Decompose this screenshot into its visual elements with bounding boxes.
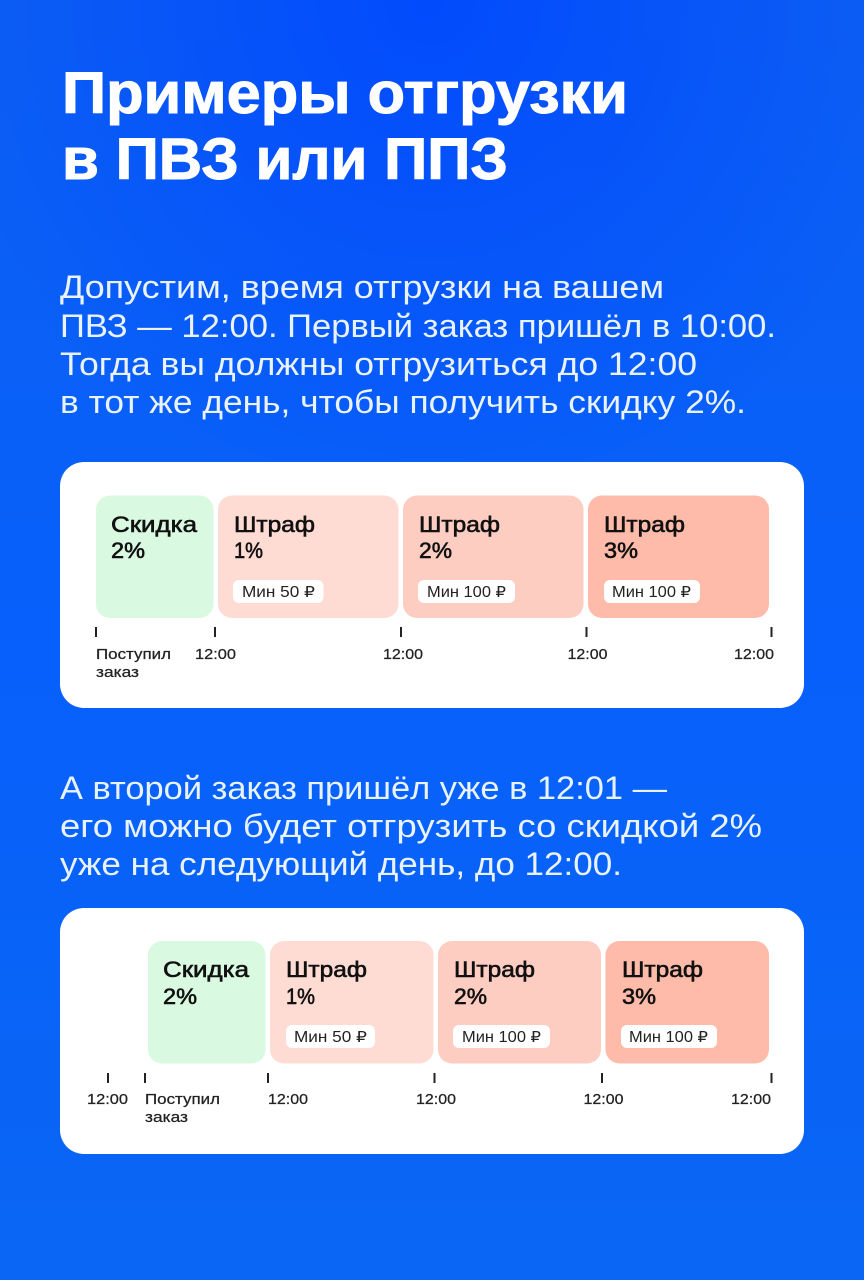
timeline ticks and labels: 12:00 bbox=[734, 646, 774, 663]
title bbox=[62, 61, 628, 192]
text block: first example: Допустим, время отгрузки на вашем bbox=[60, 269, 664, 305]
text block: second example bbox=[60, 770, 762, 882]
timeline ticks and labels: Поступил bbox=[96, 646, 171, 663]
timeline ticks and labels: 12:00 bbox=[568, 646, 608, 663]
segment: penalty 3% bbox=[588, 496, 769, 618]
segment: penalty 1% bbox=[218, 496, 398, 618]
segment: penalty 1%: 1% bbox=[234, 538, 263, 563]
timeline ticks and labels: 12:00 bbox=[584, 1091, 624, 1108]
segment: discount 2% bbox=[148, 941, 266, 1064]
segment: penalty 1% bbox=[270, 941, 434, 1064]
segment: penalty 3%: 3% bbox=[604, 538, 638, 563]
segment: penalty 1%: Штраф bbox=[234, 512, 315, 537]
panel: first timeline bbox=[60, 462, 804, 708]
timeline ticks and labels: заказ bbox=[96, 664, 139, 681]
segment: penalty 2%: 2% bbox=[419, 538, 452, 563]
title: Примеры отгрузки bbox=[62, 61, 628, 126]
segment: penalty 1%: Штраф bbox=[286, 957, 367, 982]
text block: first example: Тогда вы должны отгрузиться до 12:00 bbox=[60, 346, 697, 382]
segment: penalty 1%: Мин 50 ₽ bbox=[242, 584, 315, 601]
segment: penalty 1%: Мин 50 ₽ bbox=[294, 1029, 367, 1046]
segment: penalty 3%: Штраф bbox=[604, 512, 685, 537]
timeline ticks and labels: Поступил bbox=[145, 1091, 220, 1108]
text block: second example: уже на следующий день, до 12:00. bbox=[60, 846, 622, 882]
segment: penalty 3% bbox=[606, 941, 769, 1064]
timeline ticks and labels: заказ bbox=[145, 1109, 188, 1126]
segment: discount 2%: Скидка bbox=[111, 512, 198, 537]
segment: penalty 3%: Штраф bbox=[622, 957, 703, 982]
segment: penalty 3%: 3% bbox=[622, 984, 656, 1009]
text block: first example: в тот же день, чтобы получить скидку 2%. bbox=[60, 384, 746, 420]
timeline ticks and labels: 12:00 bbox=[416, 1091, 456, 1108]
text block: second example: А второй заказ пришёл уже в 12:01 — bbox=[60, 770, 667, 806]
segment: discount 2%: 2% bbox=[111, 538, 145, 563]
timeline ticks and labels: 12:00 bbox=[731, 1091, 771, 1108]
text block: first example bbox=[60, 269, 776, 420]
text block: second example: его можно будет отгрузить со скидкой 2% bbox=[60, 808, 762, 844]
timeline ticks and labels: 12:00 bbox=[195, 646, 236, 663]
timeline ticks and labels: 12:00 bbox=[87, 1091, 128, 1108]
timeline ticks and labels bbox=[95, 627, 774, 681]
segment: penalty 3%: Мин 100 ₽ bbox=[629, 1029, 708, 1046]
timeline ticks and labels bbox=[87, 1073, 772, 1126]
segment: penalty 3%: Мин 100 ₽ bbox=[612, 584, 691, 601]
segment: penalty 2%: Мин 100 ₽ bbox=[462, 1029, 541, 1046]
text block: first example: ПВЗ — 12:00. Первый заказ пришёл в 10:00. bbox=[60, 308, 776, 344]
timeline ticks and labels: 12:00 bbox=[383, 646, 423, 663]
segment: penalty 2%: Штраф bbox=[454, 957, 535, 982]
segment: penalty 1%: 1% bbox=[286, 984, 315, 1009]
segment: penalty 2%: 2% bbox=[454, 984, 487, 1009]
title: в ПВЗ или ППЗ bbox=[62, 127, 508, 192]
segment: penalty 2% bbox=[403, 496, 584, 618]
segment: discount 2% bbox=[96, 496, 214, 618]
segment: penalty 2% bbox=[438, 941, 601, 1064]
segment: penalty 2%: Мин 100 ₽ bbox=[427, 584, 506, 601]
panel: second timeline bbox=[60, 908, 804, 1154]
segment: penalty 2%: Штраф bbox=[419, 512, 500, 537]
segment: discount 2%: Скидка bbox=[163, 957, 250, 982]
segment: discount 2%: 2% bbox=[163, 984, 197, 1009]
timeline ticks and labels: 12:00 bbox=[268, 1091, 308, 1108]
